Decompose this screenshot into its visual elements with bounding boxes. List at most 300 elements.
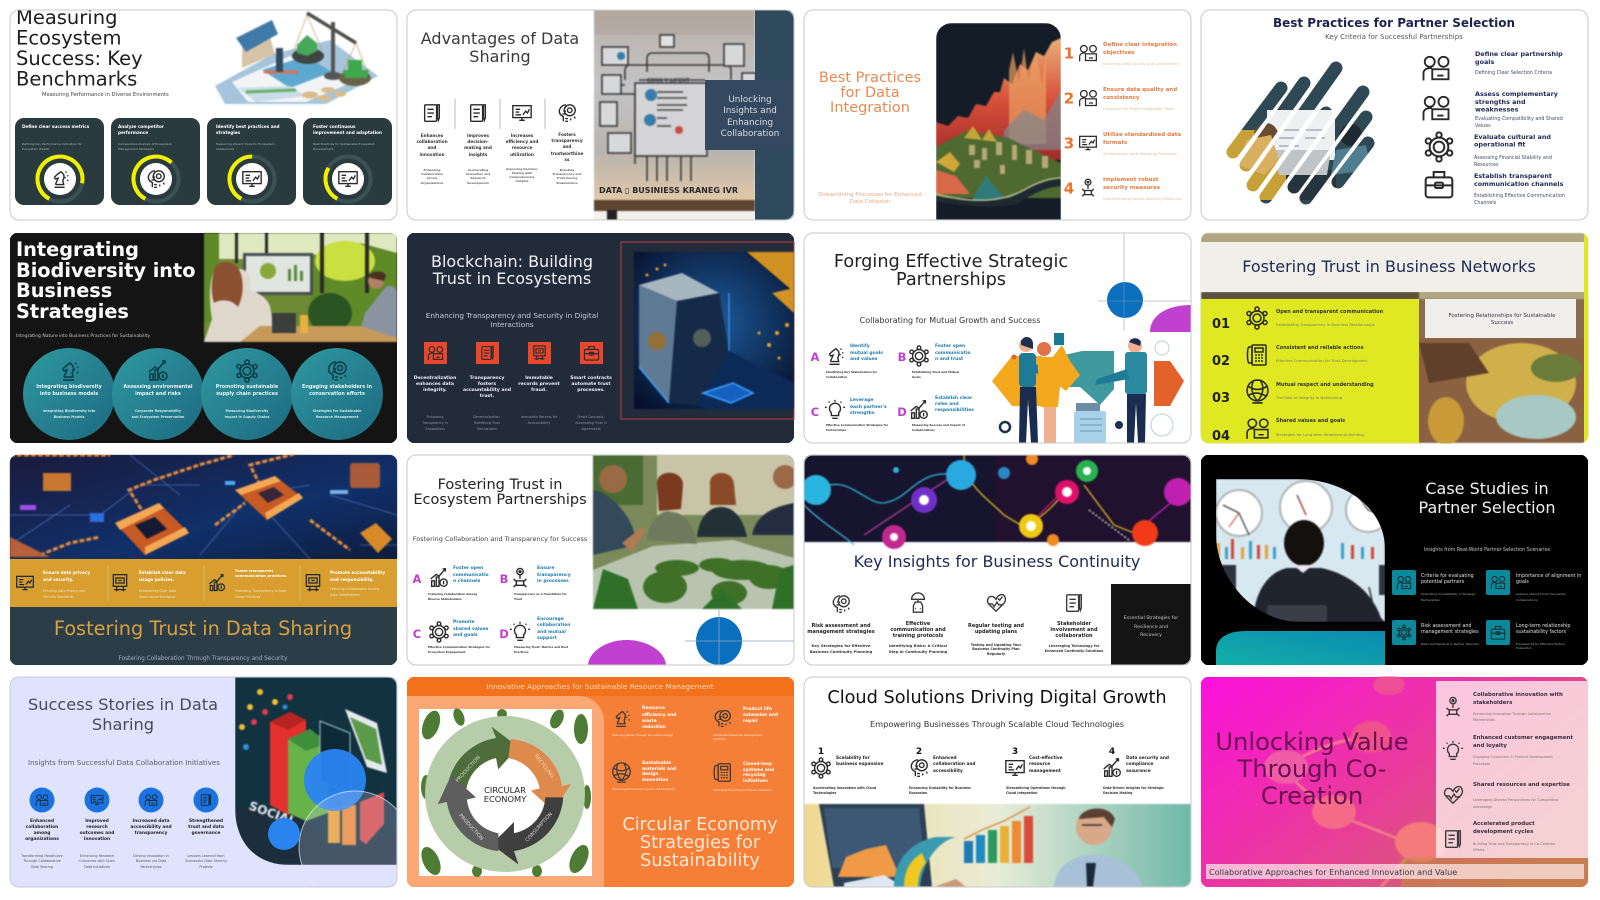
image: slashed meeting photo <box>1226 62 1374 204</box>
item: accountability <box>306 570 385 597</box>
item: data usage policies: Establish clear data <box>139 570 186 575</box>
item 03 <box>1212 380 1374 406</box>
item 4 <box>1103 747 1169 795</box>
item 3: Cloud Integration <box>1006 791 1038 795</box>
column: Transparency: trust. <box>480 393 494 399</box>
column: Smart contracts: Smart Contracts: <box>577 415 605 419</box>
image: isometric social-media charts: SOCIAL <box>247 799 298 829</box>
column: Improved research: research <box>86 824 108 830</box>
card: Analyze competitor performance: Management Strategies <box>118 147 154 151</box>
title: Advantages of Data <box>421 29 579 48</box>
item text: communication: Channels <box>1474 200 1497 206</box>
panel: Fostering Trust in Business Networks <box>1201 233 1588 445</box>
item: resource efficiency: efficiency and <box>642 712 676 718</box>
column: Decentralization: Enhancing <box>427 415 443 419</box>
title band <box>1201 242 1588 292</box>
column: risk assessment: Business Continuity Planning <box>810 649 873 654</box>
column: Enhances collaboration: innovation <box>419 152 445 157</box>
decor: small blue circle <box>268 818 300 850</box>
title: Business <box>16 279 112 302</box>
column: communication and training: training protocols <box>893 633 943 639</box>
callout: Unlocking Insights and Enhancing Collaboration <box>705 80 779 150</box>
column: Increases efficiency: Making with <box>512 171 532 175</box>
column: Increased accessibility: Driving Innovation in <box>133 854 169 858</box>
column: communication and training: Identifying Risks: A Critical <box>889 643 947 648</box>
card: Foster continuous improvement and adaptation: Foster continuous <box>313 124 356 129</box>
column: Increases efficiency <box>506 106 539 183</box>
item 4: Data-Driven Insights for Strategic <box>1103 786 1164 790</box>
column: Fosters transparency: Boosting <box>560 168 574 172</box>
title: Cloud Solutions Driving Digital Growth <box>827 688 1167 708</box>
icon: strengths <box>1424 97 1448 120</box>
bubble: stakeholders: conservation efforts <box>309 391 365 397</box>
column: Transparency: accountability and <box>463 387 511 393</box>
image: data board photo <box>594 10 756 220</box>
subtitle: Interactions <box>490 320 534 329</box>
item 3: Streamlining Data Mapping Processes <box>1103 151 1177 156</box>
item C: shared values <box>453 626 489 632</box>
item A: and values <box>850 356 878 362</box>
item: customer engagement: and loyalty <box>1473 743 1507 749</box>
column: Transparency: Transparency <box>470 375 504 381</box>
column: Smart contracts <box>570 342 612 431</box>
card: Analyze competitor performance: Comparative Analysis of Ecosystem <box>118 142 172 146</box>
item: evaluating partners: Criteria for evaluating <box>1421 573 1474 579</box>
title: Biodiversity into <box>16 259 196 282</box>
bubble: biodiversity into business models: Integrating biodiversity <box>36 384 103 390</box>
card: Identify best practices and strategies: Measuring Impact: Tools for Ecosystem <box>216 142 275 146</box>
item: evaluating partners <box>1392 570 1476 602</box>
column: Improves decision-making: making and <box>464 145 492 150</box>
column: Enhances collaboration: Organizations <box>421 181 444 185</box>
callout box <box>1111 584 1191 665</box>
title: Unlocking Value <box>1215 728 1409 756</box>
item 3: Cost-effective <box>1029 755 1063 761</box>
item D: roles and <box>935 401 959 407</box>
bubble: stakeholders: Engaging stakeholders in <box>302 384 373 390</box>
item D: Collaborations <box>912 428 935 432</box>
item 1 <box>812 747 884 795</box>
callout box: Success <box>1491 320 1513 326</box>
item C: Effective Communication Strategies for <box>826 423 889 427</box>
item A: communicatio <box>453 572 489 578</box>
item 4: 4 <box>1064 180 1074 198</box>
decor: teal panel <box>1216 631 1385 665</box>
card: Define clear success metrics: Defining Key Performance Indicators for <box>22 142 83 146</box>
column: testing plans <box>968 595 1024 656</box>
callout box: Resilience and <box>1134 624 1168 630</box>
item: customer engagement: Processes <box>1473 762 1490 766</box>
item 1: 1 <box>818 747 824 757</box>
column: Increased accessibility: Business via Data <box>136 859 166 863</box>
column: Improved research: innovation <box>84 836 110 842</box>
item 3: management <box>1029 768 1061 774</box>
title: Fostering Trust in Data Sharing <box>54 617 352 640</box>
item B: B <box>898 350 906 364</box>
item: stakeholders: Partnerships <box>1473 718 1495 722</box>
column: Enhances collaboration: Enhancing <box>424 168 440 172</box>
item: closed-loop: systems and <box>743 767 774 773</box>
item text: strengths <box>1475 90 1563 129</box>
column: risk assessment: Risk assessment and <box>811 623 871 629</box>
item B: Ensure <box>537 565 554 571</box>
card: Analyze competitor performance: performance <box>118 130 148 135</box>
item: risk assessment <box>1392 620 1479 646</box>
item text: cultural fit <box>1474 134 1552 166</box>
column: Increases efficiency: Comprehensive <box>509 175 535 179</box>
item text: goals: Define clear partnership <box>1475 50 1563 58</box>
column: Enhances collaboration: Enhances <box>421 133 444 138</box>
item: sustainability: Evaluation <box>1516 646 1532 650</box>
column: Increased accessibility: Increased data <box>133 818 169 824</box>
item text: strengths: Values <box>1475 123 1491 129</box>
column: Smart contracts: processes. <box>577 387 605 393</box>
item C: and goals <box>453 632 478 638</box>
title: Trust in Ecosystems <box>432 269 591 288</box>
card: Identify best practices and strategies: Identify best practices and <box>216 124 280 129</box>
column: Enhances collaboration: Across <box>427 176 438 180</box>
item: alignment: Collaborations <box>1516 598 1538 602</box>
item: transparent communication: Usage Practices <box>235 595 261 599</box>
column: Improved research: Improved <box>85 818 109 824</box>
diagram: circular economy <box>417 707 593 878</box>
item: stakeholders <box>1447 692 1563 722</box>
item text: strengths: Evaluating Compatibility and Shared <box>1475 116 1563 122</box>
column: stakeholder involvement: Stakeholder <box>1057 621 1092 627</box>
callout box <box>1425 299 1576 338</box>
bubble: environmental impact: and Ecosystem Preservation <box>132 415 185 419</box>
image: glowing data cube <box>634 252 794 409</box>
panel: Advantages of Data Sharing <box>407 10 794 220</box>
column: stakeholder involvement: involvement and <box>1050 627 1098 633</box>
item 02: Effective Communication for Trust Development <box>1276 358 1368 363</box>
item 3: Utilize standardized data <box>1103 132 1181 138</box>
panel: Blockchain: Building Trust in Ecosystems <box>407 233 794 443</box>
bubble: supply chain <box>201 348 293 440</box>
column: Fosters transparency: trustworthine <box>551 151 583 156</box>
item 03: The Role of Integrity in Networking <box>1275 395 1343 400</box>
title: Success Stories in Data <box>28 695 218 714</box>
bubble: environmental impact: Corporate Responsibility <box>135 409 182 413</box>
image: 3D data landscape <box>936 23 1061 220</box>
column: Enhanced collaboration: Transforming Healthcare <box>20 854 63 858</box>
image: analyst with monitor and growth chart <box>804 804 1191 887</box>
item C: each partner's <box>850 404 887 410</box>
item: stakeholders: stakeholders <box>1473 700 1512 706</box>
item C: Leverage <box>850 397 873 403</box>
card: Identify best practices and strategies <box>207 118 296 210</box>
image caption text: DATA ▯ BUSINIESS KRANEG IVR <box>599 186 738 195</box>
item 3: resource <box>1029 761 1050 767</box>
column: communication and training: Effective <box>906 621 931 627</box>
title: Ecosystem <box>16 26 121 50</box>
item: alignment <box>1486 570 1581 602</box>
item text: strengths: strengths and <box>1475 98 1526 106</box>
column: Fosters transparency: Fosters <box>558 132 576 137</box>
item 4: Implement robust <box>1103 177 1159 183</box>
item: closed-loop: recycling <box>743 772 766 778</box>
column: communication and training: Step in Continuity Planning <box>889 649 948 654</box>
column: Improves decision-making: Accelerating <box>468 168 488 172</box>
panel: Case Studies in Partner Selection <box>1201 455 1588 665</box>
title: Success: Key <box>16 47 143 70</box>
item: closed-loop: Promoting Recycling and Reuse Initiatives <box>713 788 772 792</box>
bubble: supply chain: Impact in Supply Chains <box>225 415 269 419</box>
item: data usage policies <box>113 570 186 599</box>
callout box: Recovery <box>1140 632 1162 638</box>
title: Ecosystem Partnerships <box>413 492 587 508</box>
panel: Unlocking Value Through Co-Creation <box>1201 675 1588 887</box>
item: customer engagement: Enhanced customer engagement <box>1473 735 1573 741</box>
item 4: 4 <box>1109 747 1115 757</box>
card: Identify best practices and strategies: Assessment <box>216 147 235 151</box>
illustration: partners shaking hands <box>992 333 1184 443</box>
item D <box>897 395 974 432</box>
item: evaluating partners: Evaluating Compatibility in Strategic <box>1421 592 1476 596</box>
item A <box>811 343 883 379</box>
item: alignment: goals <box>1516 579 1529 585</box>
title: Strategies <box>16 300 129 323</box>
item 3: formats <box>1103 140 1128 146</box>
item: customer engagement: Engaging Customers in Product Development <box>1473 755 1553 759</box>
title: Case Studies in <box>1425 479 1549 498</box>
column: Enhanced collaboration: Data Sharing <box>31 865 53 869</box>
title: Integrating <box>16 238 139 261</box>
bubble: stakeholders: Resource Management <box>316 415 359 419</box>
item: accountability: and responsibility. <box>330 577 374 582</box>
column: Enhanced collaboration: among <box>34 831 50 836</box>
decor: glass circle <box>299 791 411 900</box>
panel: Best Practices for Partner Selection <box>1201 10 1588 220</box>
bubble: environmental impact <box>112 348 204 440</box>
item A: A <box>413 572 422 586</box>
icon: communication <box>1426 172 1452 197</box>
card: Foster continuous improvement and adaptation: Best Practices for Sustainable Ecosystem <box>313 142 375 146</box>
item A <box>413 565 489 601</box>
column: Improves decision-making: Improves <box>467 133 489 138</box>
item text: cultural fit: Resources <box>1474 162 1499 168</box>
column: Enhances collaboration <box>416 105 448 185</box>
item 04 <box>1212 418 1364 444</box>
item: shared resources: Shared resources and expertise <box>1473 782 1570 788</box>
item: sustainable materials: Sustainable <box>642 760 671 766</box>
title: Partner Selection <box>1419 498 1555 517</box>
title: Through Co- <box>1237 755 1386 783</box>
item B: Trust <box>514 597 523 601</box>
item 2: Ensure data quality and <box>1103 87 1177 93</box>
item D: collaboration <box>537 622 570 628</box>
item 2 <box>1064 87 1177 111</box>
card: Foster continuous improvement and adaptation: Development <box>313 147 334 151</box>
item D: Establish clear <box>935 395 973 401</box>
item 4: assurance <box>1126 768 1151 774</box>
item: accelerated development: Accelerated product <box>1473 821 1535 827</box>
column: Strengthened trust: Successful Data Sharing <box>185 859 227 863</box>
item 1: Scalability for <box>836 755 871 761</box>
column: Improved research <box>79 788 115 869</box>
column: Transparency: Mechanisms <box>477 427 497 431</box>
item: risk assessment: management strategies <box>1421 629 1479 635</box>
item B: B <box>500 572 508 586</box>
item text: goals: goals <box>1475 58 1494 66</box>
column: Improves decision-making: Research <box>470 176 486 180</box>
item C: Partnerships <box>826 428 846 432</box>
image: data board photo: CONC Y LIFENT <box>647 78 690 84</box>
subtitle: Fostering Collaboration and Transparency for Success <box>413 535 588 543</box>
item 1: Accelerating Innovation with Cloud <box>813 786 877 790</box>
background: blurred world-map photo <box>1201 233 1588 445</box>
item: transparent communication <box>210 569 287 599</box>
item B: Foster open <box>935 343 965 349</box>
subtitle band <box>1206 864 1584 879</box>
column: stakeholder involvement: Leveraging Technology for <box>1049 644 1100 648</box>
item text: cultural fit: Evaluate cultural and <box>1474 133 1551 141</box>
item A: Collaboration <box>826 375 847 379</box>
item: closed-loop <box>713 761 774 792</box>
item: resource efficiency: Reducing Waste Through Innovative Design <box>612 733 673 737</box>
image: connected network nodes <box>801 453 1192 549</box>
item 2: accessibility <box>933 768 963 774</box>
diagram: circular economy: PRODUCTION <box>457 813 484 842</box>
diagram: circular economy: CONSUMPTION <box>524 811 554 843</box>
column: Smart contracts: automate trust <box>571 381 611 387</box>
column: Strengthened trust: Lessons Learned from <box>187 854 225 858</box>
item: transparent communication: Promoting Transparency in Data <box>235 589 286 593</box>
subtitle: Measuring Performance in Diverse Environments <box>42 92 169 98</box>
item: sustainable materials: Enhancing Product Life Cycles and Durability <box>612 787 675 791</box>
item: sustainability: sustainability factors <box>1516 629 1567 635</box>
column: Increases efficiency: Improving Decision- <box>506 167 539 171</box>
callout: Unlocking Insights and Enhancing Collaboration: Enhancing <box>727 118 773 128</box>
column: stakeholder involvement <box>1045 595 1103 653</box>
item A: A <box>811 350 820 364</box>
title: Integration <box>830 100 910 116</box>
item: stakeholders: Enhancing Innovation Through Collaborative <box>1473 712 1551 716</box>
panel: Success Stories in Data Sharing <box>10 677 411 900</box>
item D: Encourage <box>537 616 564 622</box>
column: Improved research: Enhancing Research <box>80 854 114 858</box>
item: sustainable materials: materials and <box>642 766 676 772</box>
item: customer engagement <box>1443 735 1573 766</box>
column: Decentralization: enhances data <box>416 381 454 387</box>
callout: Unlocking Insights and Enhancing Collaboration: Insights and <box>723 106 777 116</box>
title: Sustainability <box>640 851 760 871</box>
card: Define clear success metrics: Ecosystem Health <box>22 147 49 151</box>
item 1 <box>1064 42 1180 66</box>
column: testing plans: Testing and Updating Your <box>971 643 1022 647</box>
item: alignment: Importance of alignment in <box>1516 573 1581 579</box>
column: Improves decision-making: decision- <box>467 139 489 144</box>
column: Improved research: outcomes and <box>80 830 114 836</box>
item: data privacy: Security Standards <box>43 595 74 599</box>
item: accountability: Data Stakeholders <box>330 593 360 597</box>
item 4 <box>1064 177 1182 201</box>
title: Fostering Trust in Business Networks <box>1242 257 1536 276</box>
side panel <box>1436 681 1588 858</box>
title: Benchmarks <box>16 68 137 90</box>
title: Creation <box>1261 782 1363 810</box>
top band text: Innovative Approaches for Sustainable Resource Management <box>486 682 714 691</box>
column: Decentralization: Transactions <box>424 427 445 431</box>
item: data privacy: Ensuring Data Privacy and <box>43 589 85 593</box>
column: Fosters transparency: Stakeholders <box>556 181 578 185</box>
item A: Foster open <box>453 565 483 571</box>
item: sustainability: Frameworks for Effective Partner <box>1516 642 1566 646</box>
decor: blue circle <box>304 749 366 811</box>
column: Enhanced collaboration: Through Collaborative <box>22 859 61 863</box>
item C: Effective Communication Strategies for <box>428 645 491 649</box>
item D: Practices <box>514 650 529 654</box>
item D: D <box>499 627 509 641</box>
item text: goals: Defining Clear Selection Criteria <box>1475 70 1552 76</box>
item 1: Define clear integration <box>1103 42 1177 48</box>
red frame <box>621 242 794 419</box>
item: resource efficiency: waste <box>642 718 657 724</box>
item: product life <box>713 706 778 741</box>
item 3 <box>1064 132 1181 156</box>
item: sustainable materials <box>612 760 676 791</box>
column: Transparency: fosters <box>478 381 496 387</box>
icon: cultural fit <box>1426 132 1452 162</box>
subtitle: Collaborating for Mutual Growth and Success <box>860 316 1040 325</box>
item: risk assessment: Risk assessment and <box>1421 623 1471 629</box>
column: Immutable records: records prevent <box>518 381 560 387</box>
item: accelerated development <box>1446 821 1555 852</box>
item 01: Establishing Transparency in Business Relationships <box>1276 322 1375 327</box>
column: Enhanced collaboration <box>20 788 63 869</box>
column: testing plans: Business Continuity Plan <box>972 647 1020 651</box>
subtitle: Fostering Collaboration Through Transparency and Security <box>119 656 288 662</box>
item: sustainable materials: innovation <box>642 777 668 783</box>
column: Increased accessibility: transparency <box>135 830 168 836</box>
item: risk assessment: Risks and Rewards in Partner Selection <box>1421 642 1479 646</box>
item D: Measuring Success and Impact of <box>912 423 966 427</box>
column: Smart contracts: Smart contracts <box>570 375 612 381</box>
subtitle: Insights from Successful Data Collaboration Initiatives <box>28 758 220 767</box>
column: Strengthened trust: Strengthened <box>189 818 223 824</box>
item C <box>811 397 889 432</box>
title: Partnerships <box>896 270 1006 290</box>
column: communication and training: communication and <box>890 627 946 633</box>
panel: Fostering Trust in Ecosystem Partnerships <box>407 455 797 666</box>
item A: n channels <box>453 578 481 584</box>
item: evaluating partners: Partnerships <box>1421 598 1440 602</box>
item text: communication: Establishing Effective Communication <box>1474 193 1565 199</box>
item: data privacy: and security. <box>43 577 74 582</box>
column: Enhanced collaboration: organizations <box>25 836 59 842</box>
column: Immutable records: fraud. <box>531 387 547 393</box>
column: Improved research: Data Initiatives <box>84 865 110 869</box>
item C: strengths <box>850 410 875 416</box>
column: Increased accessibility: accessibility and <box>130 824 172 830</box>
column: stakeholder involvement: Enhanced Continuity Solutions <box>1045 649 1103 653</box>
column: Enhanced collaboration: collaboration <box>26 824 58 830</box>
subtitle: Data Cohesion <box>850 199 891 205</box>
column: Fosters transparency <box>551 105 583 185</box>
item 3: 3 <box>1012 747 1018 757</box>
item: shared resources <box>1445 782 1570 809</box>
item text: communication: Establish transparent <box>1474 172 1552 180</box>
item B <box>898 343 971 379</box>
column: Fosters transparency: and <box>563 144 571 149</box>
column: Increases efficiency: resource <box>512 145 532 150</box>
item 2: Enhancing Scalability for Business <box>909 786 971 790</box>
title: Best Practices <box>819 70 921 86</box>
column: Increases efficiency: Insights <box>515 179 529 183</box>
item C: Promote <box>453 619 475 625</box>
item 1: 1 <box>1064 44 1074 62</box>
item: closed-loop: Closed-loop <box>743 761 772 767</box>
